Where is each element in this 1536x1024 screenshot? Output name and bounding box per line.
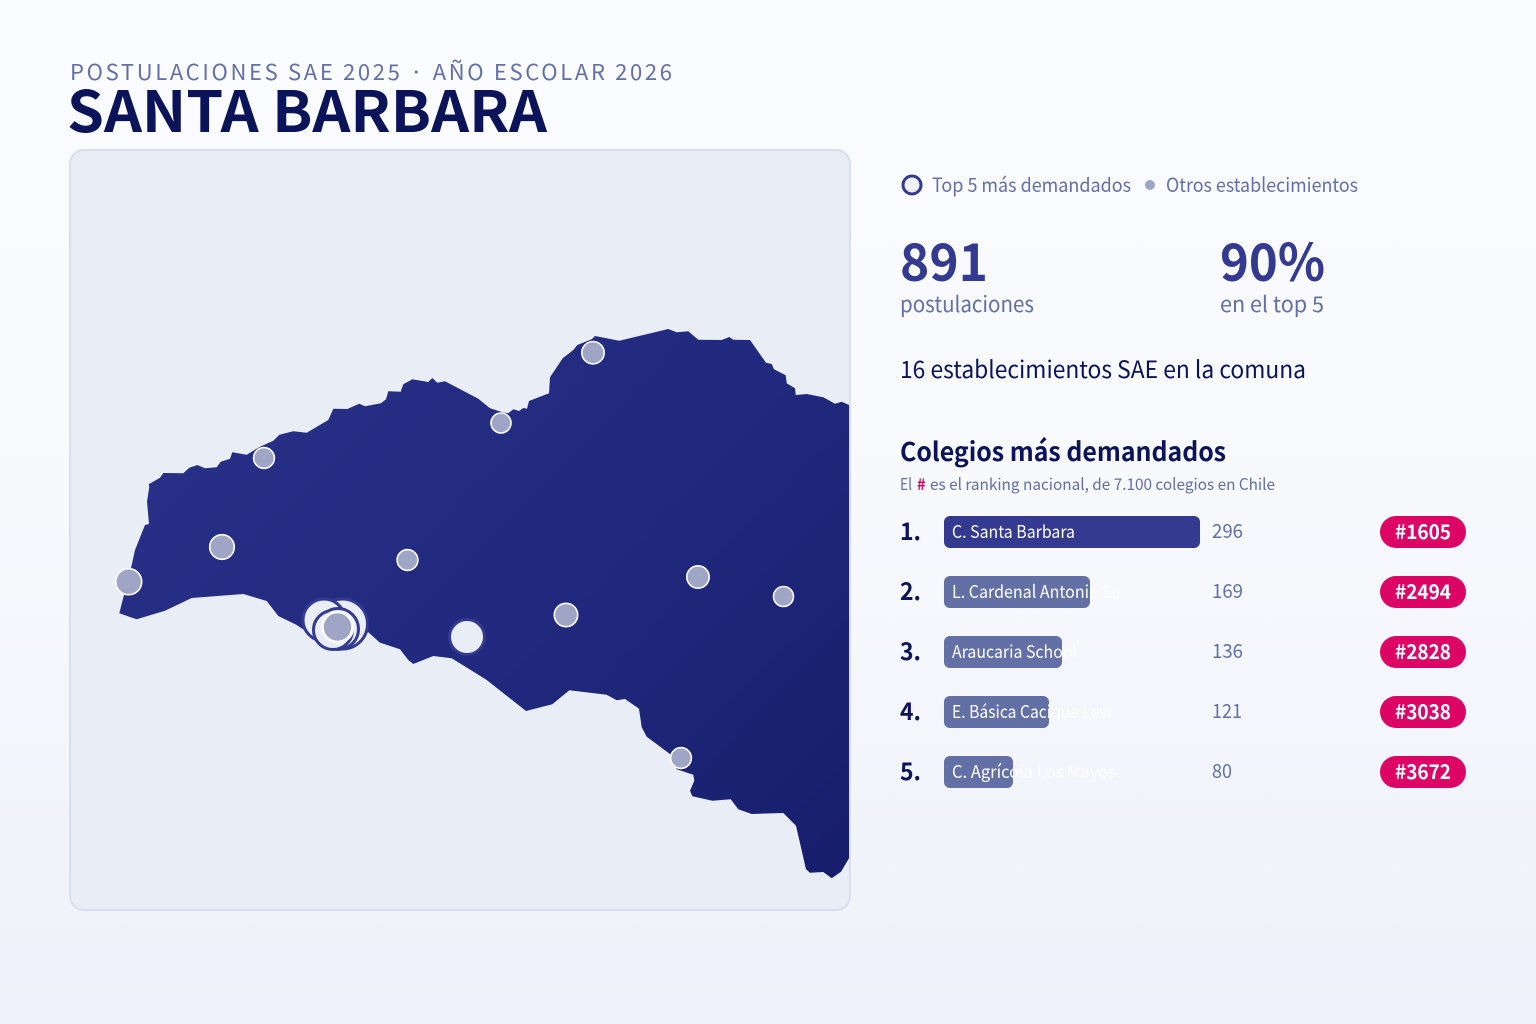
ranking note: El — [900, 471, 912, 495]
row 3: 136 — [1212, 635, 1243, 664]
panel: map — [70, 150, 850, 910]
header — [67, 55, 672, 149]
markers: top 5 — [303, 599, 484, 654]
row 3 — [900, 632, 1466, 668]
markers: otros establecimientos — [116, 342, 793, 768]
row 3: #2828 — [1395, 636, 1451, 665]
row 4: 121 — [1212, 695, 1242, 724]
row 5: C. Agrícola Los Mayos — [952, 759, 1116, 784]
title: SANTA BARBARA — [67, 67, 547, 149]
legend — [903, 169, 1358, 198]
row 2: #2494 — [1395, 576, 1451, 605]
row 4 — [900, 692, 1466, 728]
stat: postulaciones — [900, 221, 1034, 319]
establecimientos count: 16 establecimientos SAE en la comuna — [900, 350, 1306, 385]
map card background — [70, 150, 850, 910]
row 1: 1. — [900, 512, 921, 547]
ranking heading: Colegios más demandados — [900, 432, 1226, 469]
row 1: C. Santa Barbara — [952, 519, 1075, 544]
ranking note: es el ranking nacional, de 7.100 colegios en Chile — [930, 471, 1275, 495]
legend: otros: Otros establecimientos — [1166, 169, 1358, 198]
row 2: 2. — [900, 572, 921, 607]
row 5: 5. — [900, 752, 921, 787]
stat: postulaciones: 891 — [900, 221, 988, 296]
stat: postulaciones: postulaciones — [900, 287, 1034, 319]
row 4: E. Básica Cacique Levi — [952, 699, 1112, 724]
legend: top 5: Top 5 más demandados — [932, 169, 1131, 198]
eyebrow subtitle: POSTULACIONES SAE 2025 · AÑO ESCOLAR 2026 — [70, 55, 672, 87]
row 5: 80 — [1212, 755, 1232, 784]
row 2: 169 — [1212, 575, 1243, 604]
row 2 — [900, 572, 1466, 608]
row 5 — [900, 752, 1466, 788]
row 3: Araucaria School — [952, 639, 1077, 664]
ranking note: # — [917, 471, 926, 495]
row 4: #3038 — [1395, 696, 1451, 725]
row 1: 296 — [1212, 515, 1243, 544]
stat: en el top 5: en el top 5 — [1220, 287, 1324, 319]
row 1: #1605 — [1395, 516, 1451, 545]
row 1 — [900, 512, 1466, 548]
row 3: 3. — [900, 632, 921, 667]
stat: en el top 5: 90% — [1220, 221, 1325, 296]
commune shape — [119, 329, 849, 878]
row 4: 4. — [900, 692, 921, 727]
row 5: #3672 — [1395, 756, 1451, 785]
row 2: L. Cardenal Antonio Sa — [952, 579, 1121, 604]
marker in cluster — [323, 612, 352, 642]
